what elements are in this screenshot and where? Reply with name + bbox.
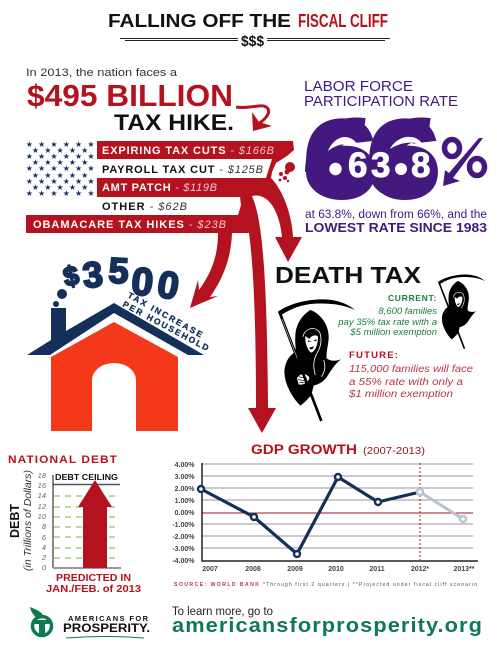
GDP x axis labels: 2008: [245, 566, 261, 573]
current rate details: 8,600 families: [378, 306, 437, 317]
GDP x axis labels: 2007: [202, 566, 218, 573]
debt ceiling label: DEBT CEILING: [55, 473, 118, 482]
big number 66 with 63.8: 6: [368, 99, 439, 219]
GDP y axis labels: 1.00%: [175, 498, 195, 505]
GDP y axis labels: -2.00%: [172, 534, 195, 541]
tax item: expiring tax cuts: EXPIRING TAX CUTS - $166B: [102, 145, 274, 157]
GDP y axis labels: -1.00%: [172, 522, 195, 529]
future rate details: 115,000 families will face: [349, 364, 473, 375]
headline: tax hike: TAX HIKE.: [114, 110, 234, 135]
icon: house with tax increase: TAX INCREASE: [126, 290, 205, 340]
GDP y axis labels: -3.00%: [172, 546, 195, 553]
debt arrow: [78, 480, 112, 568]
current rate heading: CURRENT:: [388, 293, 437, 303]
future rate details: [348, 364, 473, 400]
national debt heading: NATIONAL DEBT: [8, 454, 118, 466]
icon: house with tax increase: 5: [108, 250, 130, 292]
footer prompt: To learn more, go to: [172, 606, 273, 618]
icon: small curved arrow: [236, 106, 272, 131]
red stripes and three arrows: [26, 141, 302, 433]
icon: large grim reaper: [278, 299, 355, 421]
headline: $495 billion: $495 BILLION: [27, 78, 233, 113]
debt axis numbers: 0: [42, 563, 47, 572]
GDP x axis labels: 2009: [287, 566, 303, 573]
stars field: ★★★★★: [32, 183, 88, 192]
big number 66 with 63.8: [305, 99, 439, 219]
debt axis numbers: 12: [38, 502, 47, 511]
big number 66 with 63.8: 6: [305, 99, 376, 219]
red splatter: [279, 162, 295, 182]
icon: house with tax increase: PER HOUSEHOLD: [121, 299, 211, 353]
icon: house with tax increase: $: [61, 260, 82, 292]
stars field: ★★★★★★: [26, 189, 95, 198]
title: [108, 11, 390, 50]
GDP heading: [251, 442, 425, 457]
logo: americans for prosperity: PROSPERITY.: [63, 621, 150, 635]
title: $$$: [241, 33, 265, 50]
logo: americans for prosperity: [30, 607, 150, 638]
current rate details: [337, 306, 437, 338]
GDP x axis labels: 2010: [328, 566, 344, 573]
title: FALLING OFF THE: [108, 11, 291, 31]
stars field: ★★★★★: [32, 171, 88, 180]
GDP heading: (2007-2013): [363, 445, 425, 457]
future rate heading: FUTURE:: [349, 350, 399, 361]
footer url: americansforprosperity.org: [172, 615, 483, 637]
debt axis numbers: 4: [42, 543, 46, 552]
stars field: ★★★★★: [32, 146, 88, 155]
GDP x axis labels: [202, 566, 475, 573]
icon: house with tax increase: 3: [81, 253, 105, 296]
debt axis numbers: 16: [38, 481, 47, 490]
debt axis numbers: 18: [38, 471, 47, 480]
current rate details: $5 million exemption: [349, 327, 437, 338]
GDP x axis labels: 2011: [369, 566, 385, 573]
national debt chart: [8, 470, 121, 572]
death tax heading: DEATH TAX: [275, 262, 422, 288]
debt axis title: (in Trillions of Dollars): [23, 470, 34, 571]
labor force heading: LABOR FORCE: [304, 79, 413, 95]
labor force caption: at 63.8%, down from 66%, and the: [305, 209, 487, 221]
debt axis numbers: 14: [38, 491, 46, 500]
debt axis numbers: [38, 471, 47, 572]
debt axis numbers: 6: [42, 533, 47, 542]
GDP y axis labels: 0.00%: [175, 510, 195, 517]
stars field: ★★★★★★: [26, 152, 95, 161]
tax item: other: OTHER - $62B: [102, 201, 187, 213]
GDP heading: GDP GROWTH: [251, 442, 357, 457]
source note: *Through first 2 quarters | **Projected under fiscal cliff scenario: [263, 582, 477, 588]
stars field: ★★★★★★: [26, 164, 95, 173]
icon: house with tax increase: 0: [129, 260, 155, 305]
GDP y axis labels: 3.00%: [175, 474, 195, 481]
percent sign with down arrow: [443, 138, 484, 186]
title: FISCAL CLIFF: [298, 11, 388, 31]
GDP x axis labels: 2013**: [453, 566, 475, 573]
source note: SOURCE: WORLD BANK: [174, 582, 259, 588]
current rate details: pay 35% tax rate with a: [337, 317, 437, 328]
labor force emphasis: LOWEST RATE SINCE 1983: [305, 220, 487, 235]
GDP line chart: [172, 462, 478, 573]
icon: small grim reaper: [438, 274, 485, 349]
GDP y axis labels: [172, 462, 195, 565]
debt axis numbers: 8: [42, 522, 47, 531]
stars field: ★★★★★: [32, 158, 88, 167]
intro text: In 2013, the nation faces a: [26, 67, 178, 79]
tax item: AMT patch: AMT PATCH - $119B: [102, 182, 217, 194]
prediction note: PREDICTED IN: [56, 573, 131, 584]
GDP y axis labels: 4.00%: [175, 462, 195, 469]
debt axis numbers: 2: [41, 553, 47, 562]
tax item: obamacare tax hikes: OBAMACARE TAX HIKES - $23B: [33, 219, 226, 231]
prediction note: JAN./FEB. of 2013: [46, 584, 141, 595]
labor force heading: PARTICIPATION RATE: [304, 94, 458, 110]
future rate details: a 55% rate with only a: [349, 377, 464, 388]
debt axis title: [8, 470, 34, 571]
GDP y axis labels: -4.00%: [172, 558, 195, 565]
stars field: ★★★★★★: [26, 140, 95, 149]
logo: americans for prosperity: AMERICANS FOR: [68, 614, 149, 623]
tax item: payroll tax cut: PAYROLL TAX CUT - $125B: [102, 164, 263, 176]
debt axis numbers: 10: [38, 512, 47, 521]
future rate details: $1 million exemption: [348, 389, 453, 400]
icon: house with tax increase: [27, 250, 211, 431]
stars field: [26, 140, 95, 198]
big number 66 with 63.8: .63.8: [331, 142, 430, 185]
GDP x axis labels: 2012*: [411, 566, 429, 573]
prediction note: [46, 573, 141, 595]
labor force heading: [304, 79, 458, 110]
debt axis title: DEBT: [8, 504, 22, 538]
GDP data line: [198, 474, 466, 557]
stars field: ★★★★★★: [26, 177, 95, 186]
icon: house with tax increase: 0: [154, 264, 182, 309]
GDP y axis labels: 2.00%: [175, 486, 195, 493]
